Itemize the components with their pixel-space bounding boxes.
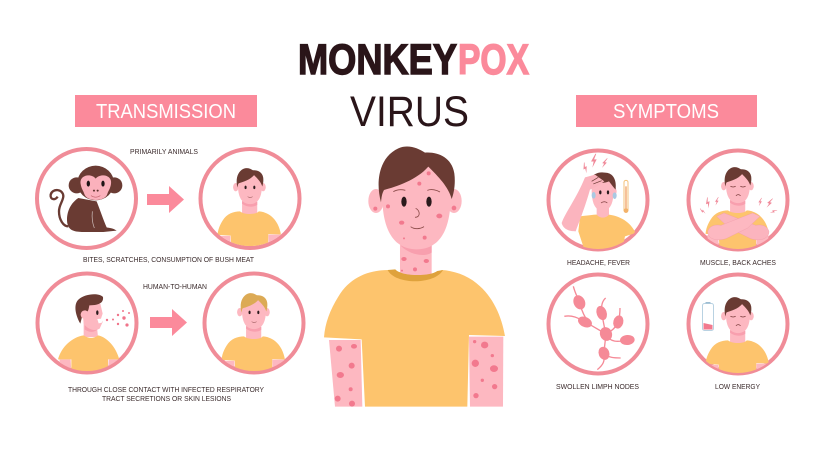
- pain bolts: [699, 197, 777, 215]
- label: swollen: SWOLLEN LIMPH NODES: [556, 384, 639, 391]
- label: close contact: THROUGH CLOSE CONTACT WITH INFECTED RESPIRATORY: [68, 387, 264, 394]
- heading: symptoms: SYMPTOMS: [613, 101, 719, 123]
- icon: monkey: [51, 166, 122, 232]
- sweat drops: [592, 192, 596, 199]
- panel: monkey: [37, 149, 136, 248]
- label: close contact: [68, 387, 264, 403]
- thermometer: [624, 180, 628, 213]
- pain bolts: [581, 154, 608, 174]
- panel: coughing person: [38, 274, 136, 374]
- title: MONKEYPOX: MONKEY: [298, 36, 457, 84]
- tired person: [706, 297, 768, 373]
- face: [401, 197, 407, 207]
- panel: healthy person: [200, 149, 300, 259]
- title: VIRUS: VIRUS: [350, 88, 469, 136]
- panel: exposed person: [204, 274, 304, 384]
- icon: lymph nodes: [564, 286, 635, 370]
- arrow: human to human: [150, 309, 187, 336]
- panel: muscle, back aches: [688, 150, 788, 258]
- label: bites: BITES, SCRATCHES, CONSUMPTION OF BUSH MEAT: [83, 257, 255, 264]
- arm: [562, 175, 604, 231]
- label: low energy: LOW ENERGY: [715, 384, 760, 391]
- person in profile: [58, 294, 119, 374]
- person holding head: [562, 172, 636, 250]
- rash spots: [335, 171, 498, 407]
- arrow: animal to human: [147, 186, 184, 213]
- central figure with rash: [324, 147, 505, 407]
- blond person: [222, 293, 285, 371]
- panel: headache, fever: [548, 150, 648, 250]
- label: human to human: HUMAN-TO-HUMAN: [143, 284, 207, 291]
- label: primarily animals: PRIMARILY ANIMALS: [130, 149, 198, 156]
- heading: transmission: TRANSMISSION: [96, 101, 236, 123]
- label: close contact: TRACT SECRETIONS OR SKIN LESIONS: [102, 396, 231, 403]
- title: MONKEYPOX: POX: [458, 36, 529, 84]
- label: muscle: MUSCLE, BACK ACHES: [700, 260, 776, 267]
- person: [218, 168, 281, 246]
- person with crossed arms: [706, 167, 769, 258]
- icon: battery: [702, 302, 714, 330]
- heading: transmission: [75, 95, 257, 127]
- panel: low energy: [688, 274, 788, 388]
- panel: swollen lymph nodes: [548, 274, 648, 374]
- label: headache: HEADACHE, FEVER: [567, 260, 630, 267]
- droplets: [106, 310, 130, 327]
- heading: symptoms: [576, 95, 757, 127]
